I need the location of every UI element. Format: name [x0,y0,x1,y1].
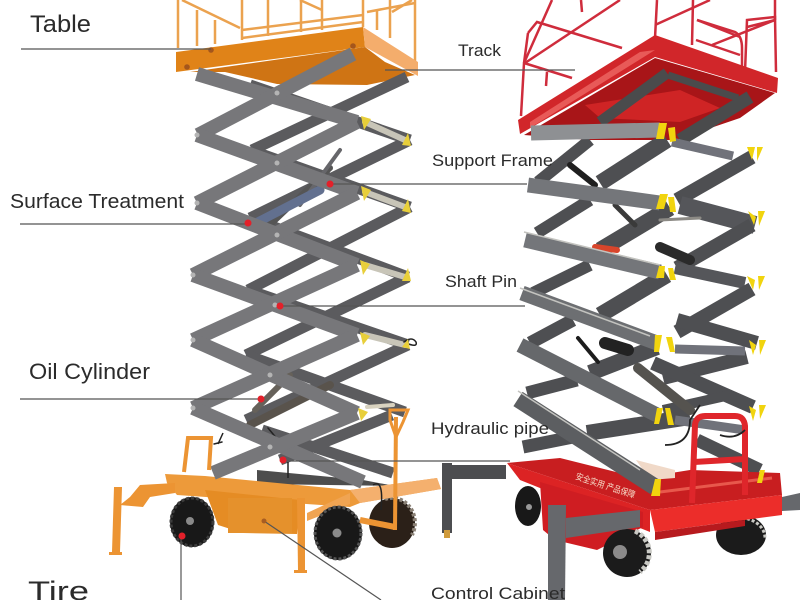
front grey outrigger [548,505,640,600]
callout dots [178,180,334,540]
red table platform [518,35,778,140]
label: Table: Table [30,11,91,38]
label: Oil Cylinder: Oil Cylinder [29,359,150,384]
front scissor arms [518,130,660,487]
label: Track: Track [458,41,502,60]
rear scissor arms [523,140,760,470]
label: Support Frame: Support Frame [432,151,553,170]
label: Surface Treatment: Surface Treatment [10,191,184,213]
label: Shaft Pin: Shaft Pin [445,272,517,291]
hydraulic hoses [218,433,382,510]
back wheels [515,486,766,555]
orange table platform [176,27,418,85]
arm pivot bolts [190,90,280,450]
red push handle [692,416,745,503]
rear cross beams [672,142,745,430]
rear scissor arms [246,77,410,473]
orange scissor lift [109,0,441,573]
orange rear frame [184,438,211,472]
hydraulic hoses [665,405,745,445]
hydraulic rams [570,165,700,410]
yellow arm brackets [358,116,411,421]
left grey outrigger [442,463,506,538]
front wheel [603,529,651,577]
chinese decal on base: 安全实用 产品保障 [574,470,637,500]
red scissor lift [442,0,800,600]
red base and deck [507,458,782,550]
orange base and deck [165,470,441,534]
red guard railing [521,0,776,116]
yellow arm brackets [651,123,766,496]
wheels [170,497,362,560]
orange guard railing [178,0,415,62]
front scissor arms [193,54,363,482]
front outrigger [294,498,307,573]
bright edges on arms [518,232,660,470]
label: Hydraulic pipe: Hydraulic pipe [431,419,549,438]
right grey outrigger [782,493,800,511]
pull handle [360,410,408,530]
hydraulic cylinders [214,122,416,444]
rear wheel [369,498,415,548]
platform underframe [600,73,750,140]
left outrigger [109,483,175,555]
leader lines [20,49,575,600]
